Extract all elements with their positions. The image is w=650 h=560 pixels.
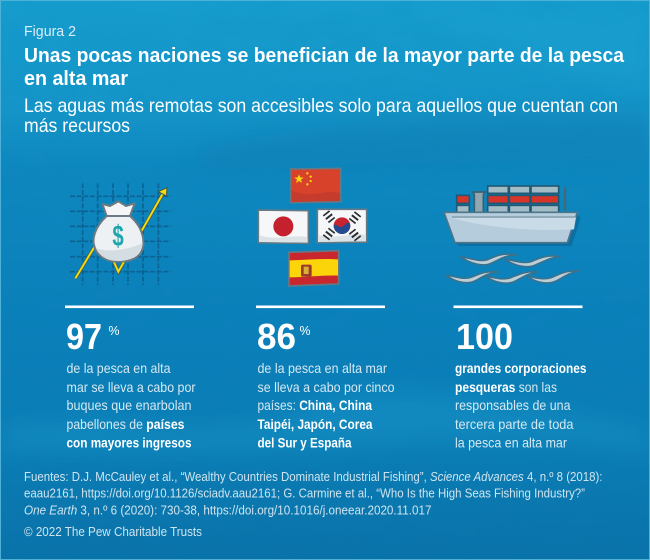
flag: China xyxy=(291,168,341,203)
column 2: 86%: del Sur y España xyxy=(258,434,352,450)
column 1: 97%: mar se lleva a cabo por xyxy=(66,379,196,395)
flag: Japan xyxy=(258,210,308,243)
rising arrow xyxy=(75,188,167,278)
column 3: 100 xyxy=(454,306,587,450)
column 3: 100: la pesca en alta mar xyxy=(455,434,567,450)
column 2: 86%: % xyxy=(300,323,311,338)
subtitle xyxy=(24,95,618,137)
column 1: 97% xyxy=(65,306,196,450)
column 3: 100: 100 xyxy=(456,316,513,357)
column 1: 97%: pabellones de países xyxy=(66,416,185,432)
icon: flags xyxy=(258,168,367,286)
title xyxy=(24,45,625,90)
title: en alta mar xyxy=(24,68,128,90)
figure label: Figura 2 xyxy=(24,23,76,40)
column 1: 97%: de la pesca en alta xyxy=(66,360,171,376)
money bag: $ xyxy=(112,220,124,253)
icon: money bag on rising chart xyxy=(70,183,171,285)
column 3: 100: grandes corporaciones xyxy=(455,360,587,376)
ship xyxy=(444,186,581,246)
column 2: 86%: Taipéi, Japón, Corea xyxy=(258,416,373,432)
column 2: 86%: se lleva a cabo por cinco xyxy=(258,379,395,395)
column 2: 86%: de la pesca en alta mar xyxy=(258,360,387,376)
icon: container ship and fish xyxy=(444,186,581,283)
sources: Fuentes: D.J. McCauley et al., “Wealthy Countries Dominate Industrial Fishing”, Science Advances 4, n.º 8 (2018): xyxy=(24,469,602,484)
column 3: 100: responsables de una xyxy=(455,397,571,413)
fish school xyxy=(446,254,579,283)
flag: Spain xyxy=(289,251,339,286)
chart grid xyxy=(70,183,171,285)
column 3: 100: pesqueras son las xyxy=(455,379,557,395)
column 2: 86%: 86 xyxy=(257,316,296,357)
column 2: 86% xyxy=(256,306,395,450)
column 1: 97%: % xyxy=(108,323,120,338)
column 3: 100: tercera parte de toda xyxy=(455,416,574,432)
column 1: 97%: 97 xyxy=(66,316,102,357)
flag: South Korea xyxy=(317,209,367,243)
sources: One Earth 3, n.º 6 (2020): 730-38, https://doi.org/10.1016/j.oneear.2020.11.017 xyxy=(24,502,432,518)
title: Unas pocas naciones se benefician de la mayor parte de la pesca xyxy=(24,45,625,67)
sources xyxy=(24,469,602,518)
copyright: © 2022 The Pew Charitable Trusts xyxy=(24,524,202,539)
column 1: 97%: con mayores ingresos xyxy=(66,434,192,450)
subtitle: más recursos xyxy=(24,115,130,137)
sources: eaau2161, https://doi.org/10.1126/sciadv.aau2161; G. Carmine et al., “Who Is the High Seas Fishing Industry?” xyxy=(24,486,585,500)
column 1: 97%: buques que enarbolan xyxy=(66,397,192,413)
column 2: 86%: países: China, China xyxy=(258,397,372,413)
